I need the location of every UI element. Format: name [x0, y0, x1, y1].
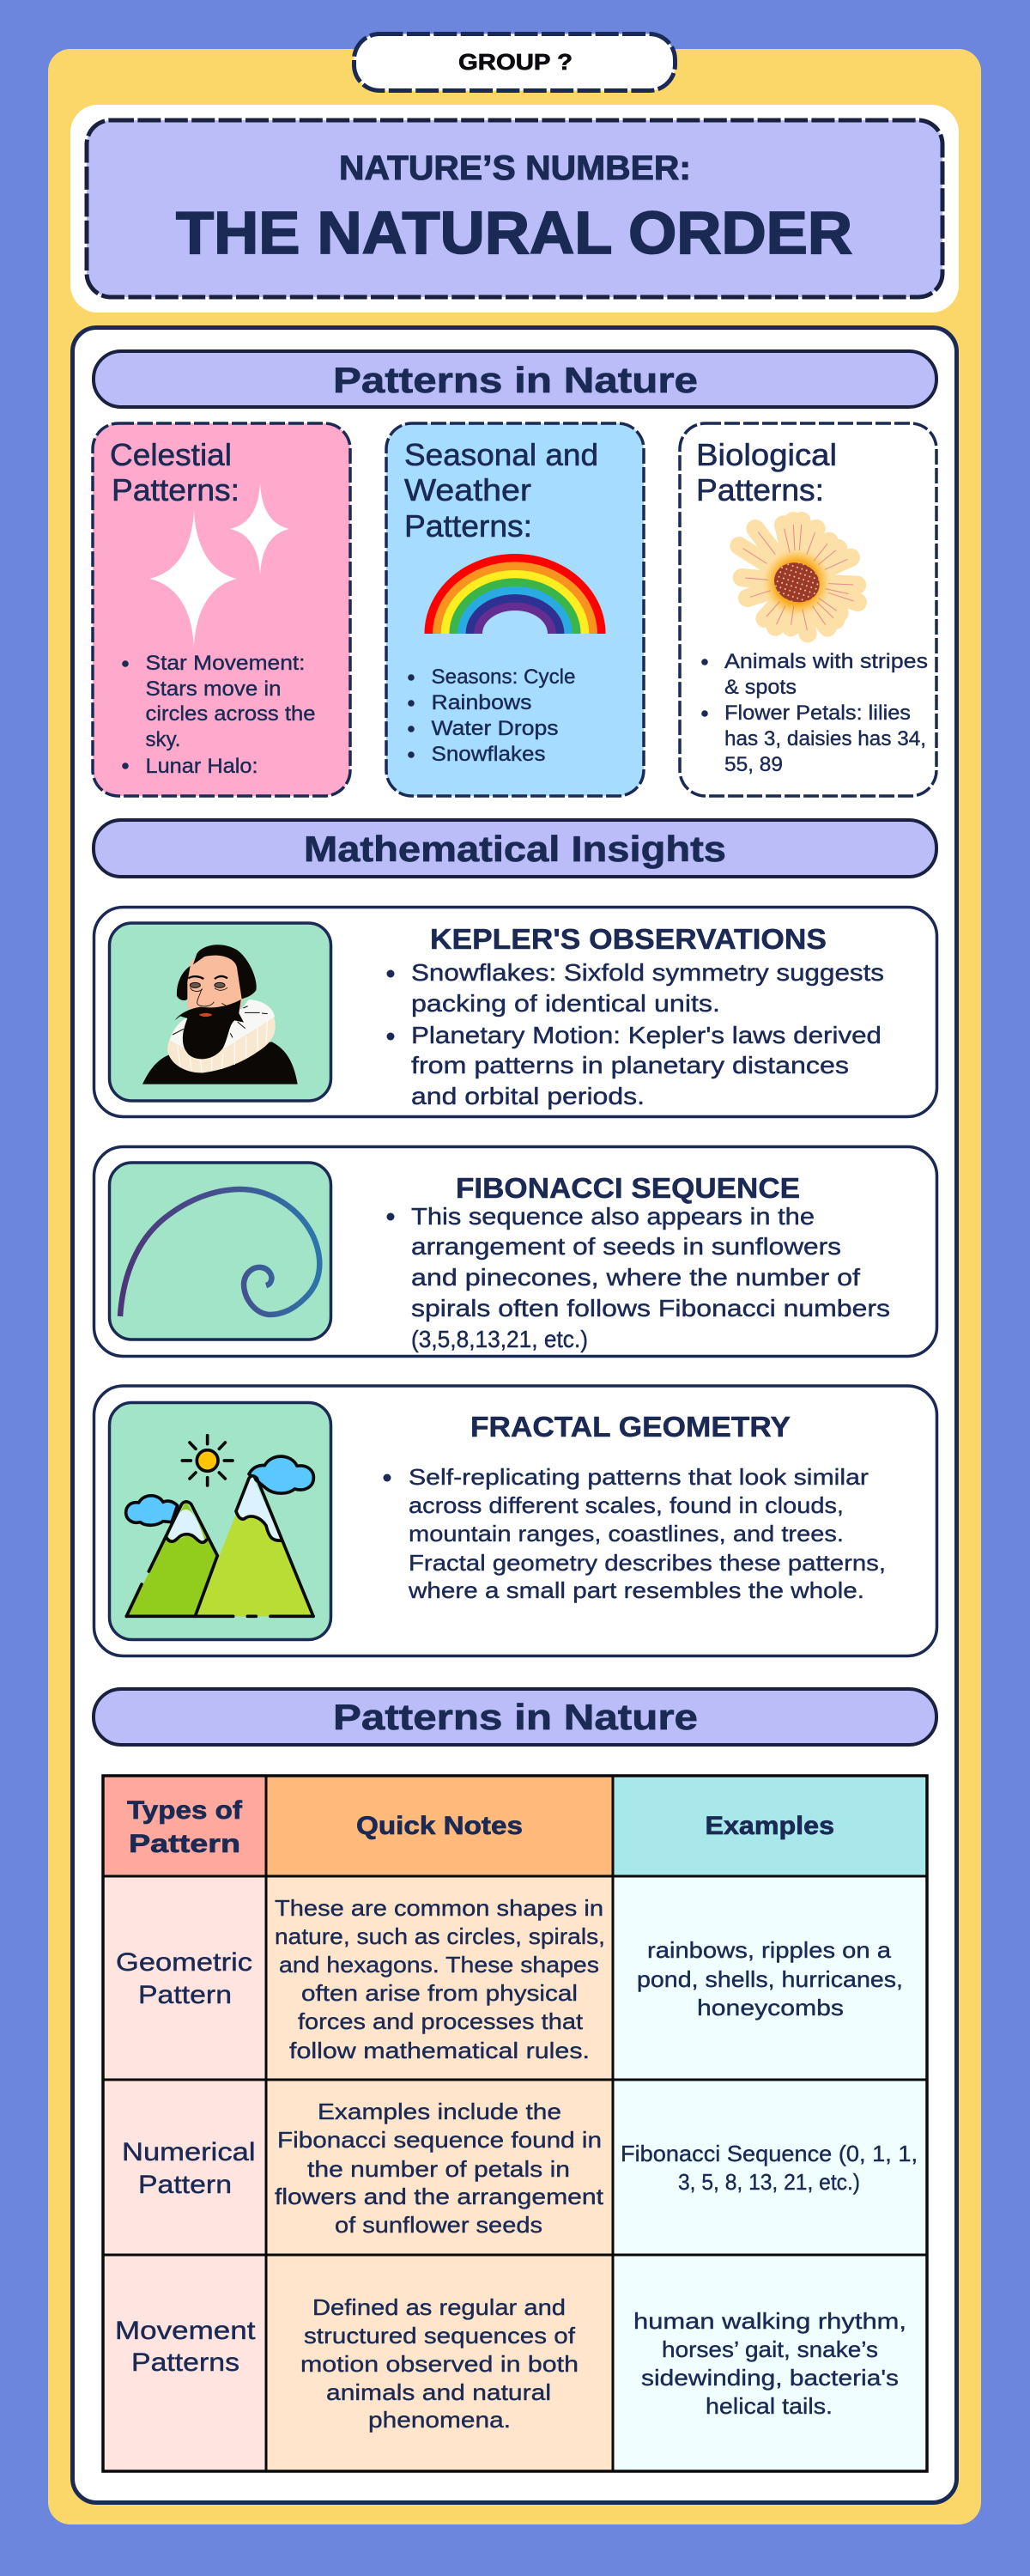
list: fractal: across different scales, found in clouds, — [409, 1492, 844, 1518]
image: kepler portrait — [110, 923, 331, 1101]
row: movement patterns: Defined as regular and — [312, 2294, 566, 2320]
list: fractal: where a small part resembles the whole. — [408, 1577, 864, 1603]
list: fibonacci: spirals often follows Fibonacci numbers — [411, 1295, 890, 1321]
list: celestial: circles across the — [146, 702, 316, 726]
section heading: patterns in nature — [94, 351, 936, 407]
row: geometric pattern: Pattern — [138, 1981, 232, 2009]
list: fractal: mountain ranges, coastlines, and trees. — [409, 1521, 844, 1546]
panel: celestial patterns — [93, 423, 350, 796]
subtitle: NATURE’S NUMBER: — [339, 149, 691, 187]
image: mountains — [110, 1403, 331, 1640]
title panel — [70, 105, 959, 313]
panel: fibonacci sequence — [94, 1147, 937, 1357]
table header row: Types of — [127, 1796, 243, 1825]
heading: biological: Patterns: — [696, 472, 824, 507]
list: seasonal — [408, 665, 575, 766]
list: biological: 55, 89 — [724, 753, 783, 776]
panel: seasonal and weather patterns — [386, 423, 644, 796]
list: celestial: sky. — [146, 728, 180, 751]
panel: kepler's observations — [94, 907, 937, 1116]
list: celestial: Stars move in — [146, 677, 282, 701]
list: fractal — [383, 1464, 886, 1603]
list: fibonacci: arrangement of seeds in sunflowers — [411, 1233, 841, 1260]
image: fibonacci spiral — [110, 1163, 331, 1340]
row: numerical pattern: Numerical — [122, 2138, 256, 2166]
list: kepler: from patterns in planetary distances — [411, 1052, 849, 1078]
list: celestial: Lunar Halo: — [146, 755, 258, 778]
row: numerical pattern: 3, 5, 8, 13, 21, etc.) — [678, 2169, 860, 2195]
row: geometric pattern: These are common shapes in — [275, 1895, 603, 1921]
row: numerical pattern: the number of petals in — [307, 2156, 570, 2182]
list: seasonal: Rainbows — [431, 691, 532, 714]
section heading: patterns in nature: Patterns in Nature — [333, 360, 698, 400]
list: fibonacci — [386, 1203, 890, 1352]
row: geometric pattern: pond, shells, hurricanes, — [637, 1966, 903, 1992]
row: movement patterns: sidewinding, bacteria's — [641, 2365, 899, 2391]
row: movement patterns: Movement — [115, 2317, 256, 2345]
section heading: mathematical insights — [94, 820, 936, 877]
panel: biological patterns — [680, 423, 936, 796]
row: geometric pattern — [103, 1876, 927, 2080]
section heading: patterns in nature (table): Patterns in Nature — [333, 1697, 698, 1737]
row: geometric pattern: follow mathematical rules. — [289, 2038, 590, 2063]
heading: kepler: KEPLER'S OBSERVATIONS — [430, 923, 827, 955]
list: biological: has 3, daisies has 34, — [724, 727, 926, 750]
row: geometric pattern: Geometric — [116, 1948, 252, 1977]
list: biological: Flower Petals: lilies — [724, 702, 911, 725]
group label — [354, 34, 675, 91]
row: movement patterns: motion observed in both — [300, 2351, 579, 2377]
list: seasonal: Snowflakes — [431, 743, 546, 766]
list: seasonal: Seasons: Cycle — [431, 665, 575, 689]
row: numerical pattern: flowers and the arrangement — [275, 2184, 604, 2209]
list: biological: & spots — [724, 676, 797, 699]
row: movement patterns: horses’ gait, snake’s — [662, 2336, 878, 2362]
list: biological: Animals with stripes — [724, 650, 928, 673]
group label: GROUP ? — [458, 49, 573, 75]
row: movement patterns: Patterns — [131, 2348, 239, 2377]
table: types of pattern — [103, 1776, 927, 2471]
row: movement patterns: structured sequences of — [304, 2323, 576, 2348]
row: numerical pattern — [103, 2080, 927, 2255]
list: fibonacci: (3,5,8,13,21, etc.) — [411, 1326, 588, 1352]
heading: biological: Biological — [696, 437, 837, 472]
row: numerical pattern: of sunflower seeds — [335, 2212, 542, 2238]
list: seasonal: Water Drops — [431, 717, 558, 740]
list: fractal: Fractal geometry describes these patterns, — [409, 1550, 886, 1576]
table outer border — [103, 1776, 927, 2471]
row: numerical pattern: Examples include the — [318, 2099, 561, 2124]
row: movement patterns: human walking rhythm, — [633, 2308, 906, 2334]
section heading: mathematical insights: Mathematical Insights — [304, 829, 726, 869]
row: numerical pattern: Pattern — [138, 2171, 232, 2199]
row: movement patterns — [103, 2255, 927, 2471]
row: movement patterns: helical tails. — [706, 2393, 833, 2419]
row: geometric pattern: rainbows, ripples on a — [647, 1937, 892, 1963]
list: biological — [701, 650, 928, 776]
row: numerical pattern: Fibonacci sequence found in — [277, 2127, 602, 2153]
heading: celestial: Celestial — [110, 437, 232, 472]
icon: rainbow — [424, 554, 606, 634]
list: kepler: Snowflakes: Sixfold symmetry suggests — [411, 959, 884, 986]
main title: THE NATURAL ORDER — [176, 199, 852, 266]
row: movement patterns: phenomena. — [368, 2407, 511, 2433]
section heading: patterns in nature (table) — [94, 1689, 936, 1745]
table header row: Pattern — [129, 1830, 240, 1858]
heading: celestial: Patterns: — [112, 472, 239, 507]
row: geometric pattern: and hexagons. These shapes — [279, 1952, 599, 1978]
list: kepler: and orbital periods. — [411, 1083, 645, 1109]
icon: sparkling stars — [149, 483, 289, 648]
list: fibonacci: and pinecones, where the number of — [411, 1264, 860, 1291]
row: geometric pattern: nature, such as circles, spirals, — [275, 1923, 605, 1949]
icon: sunflower — [739, 521, 857, 634]
list: fractal: Self-replicating patterns that look similar — [409, 1464, 869, 1490]
heading: seasonal: Seasonal and — [404, 437, 598, 472]
row: numerical pattern: Fibonacci Sequence (0, 1, 1, — [621, 2141, 918, 2166]
list: kepler: packing of identical units. — [411, 990, 720, 1017]
row: geometric pattern: honeycombs — [697, 1995, 844, 2020]
table header row — [103, 1776, 927, 1876]
table header row: Quick Notes — [356, 1812, 523, 1840]
row: movement patterns: animals and natural — [326, 2379, 551, 2405]
content panel — [72, 328, 956, 2502]
list: celestial — [122, 652, 316, 778]
panel: fractal geometry — [94, 1386, 937, 1656]
list: kepler — [386, 959, 884, 1109]
heading: fibonacci: FIBONACCI SEQUENCE — [456, 1172, 800, 1204]
table grid lines — [103, 1776, 927, 2471]
list: celestial: Star Movement: — [146, 652, 306, 675]
heading: seasonal: Patterns: — [404, 508, 532, 544]
heading: seasonal: Weather — [404, 472, 531, 507]
row: geometric pattern: often arise from physical — [301, 1980, 578, 2006]
list: kepler: Planetary Motion: Kepler's laws derived — [411, 1022, 882, 1048]
row: geometric pattern: forces and processes that — [298, 2008, 584, 2034]
list: fibonacci: This sequence also appears in the — [411, 1203, 815, 1230]
heading: fractal: FRACTAL GEOMETRY — [470, 1411, 791, 1443]
table header row: Examples — [706, 1812, 834, 1840]
